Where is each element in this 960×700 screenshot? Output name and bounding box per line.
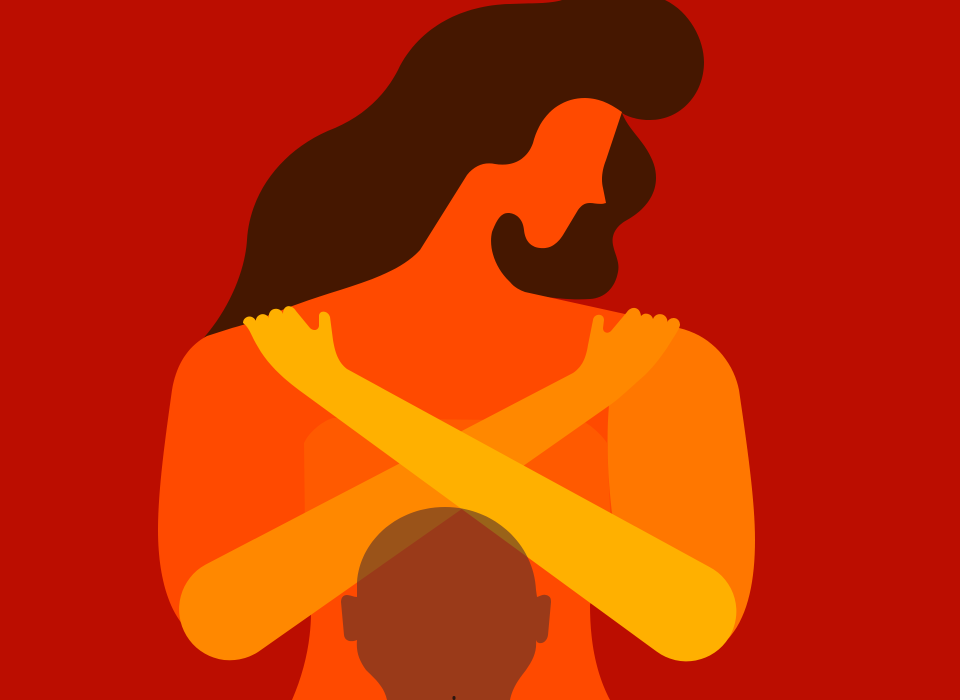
arm left hand, yellow xyxy=(243,306,736,661)
head silhouette xyxy=(341,507,551,700)
upper arm left xyxy=(158,328,305,642)
body: face, neck and torso xyxy=(232,98,640,700)
upper arm right xyxy=(608,328,755,660)
arm right hand, orange xyxy=(179,308,680,660)
hair xyxy=(200,0,704,342)
torso lighter panel xyxy=(304,418,611,530)
neck mark xyxy=(452,696,456,700)
